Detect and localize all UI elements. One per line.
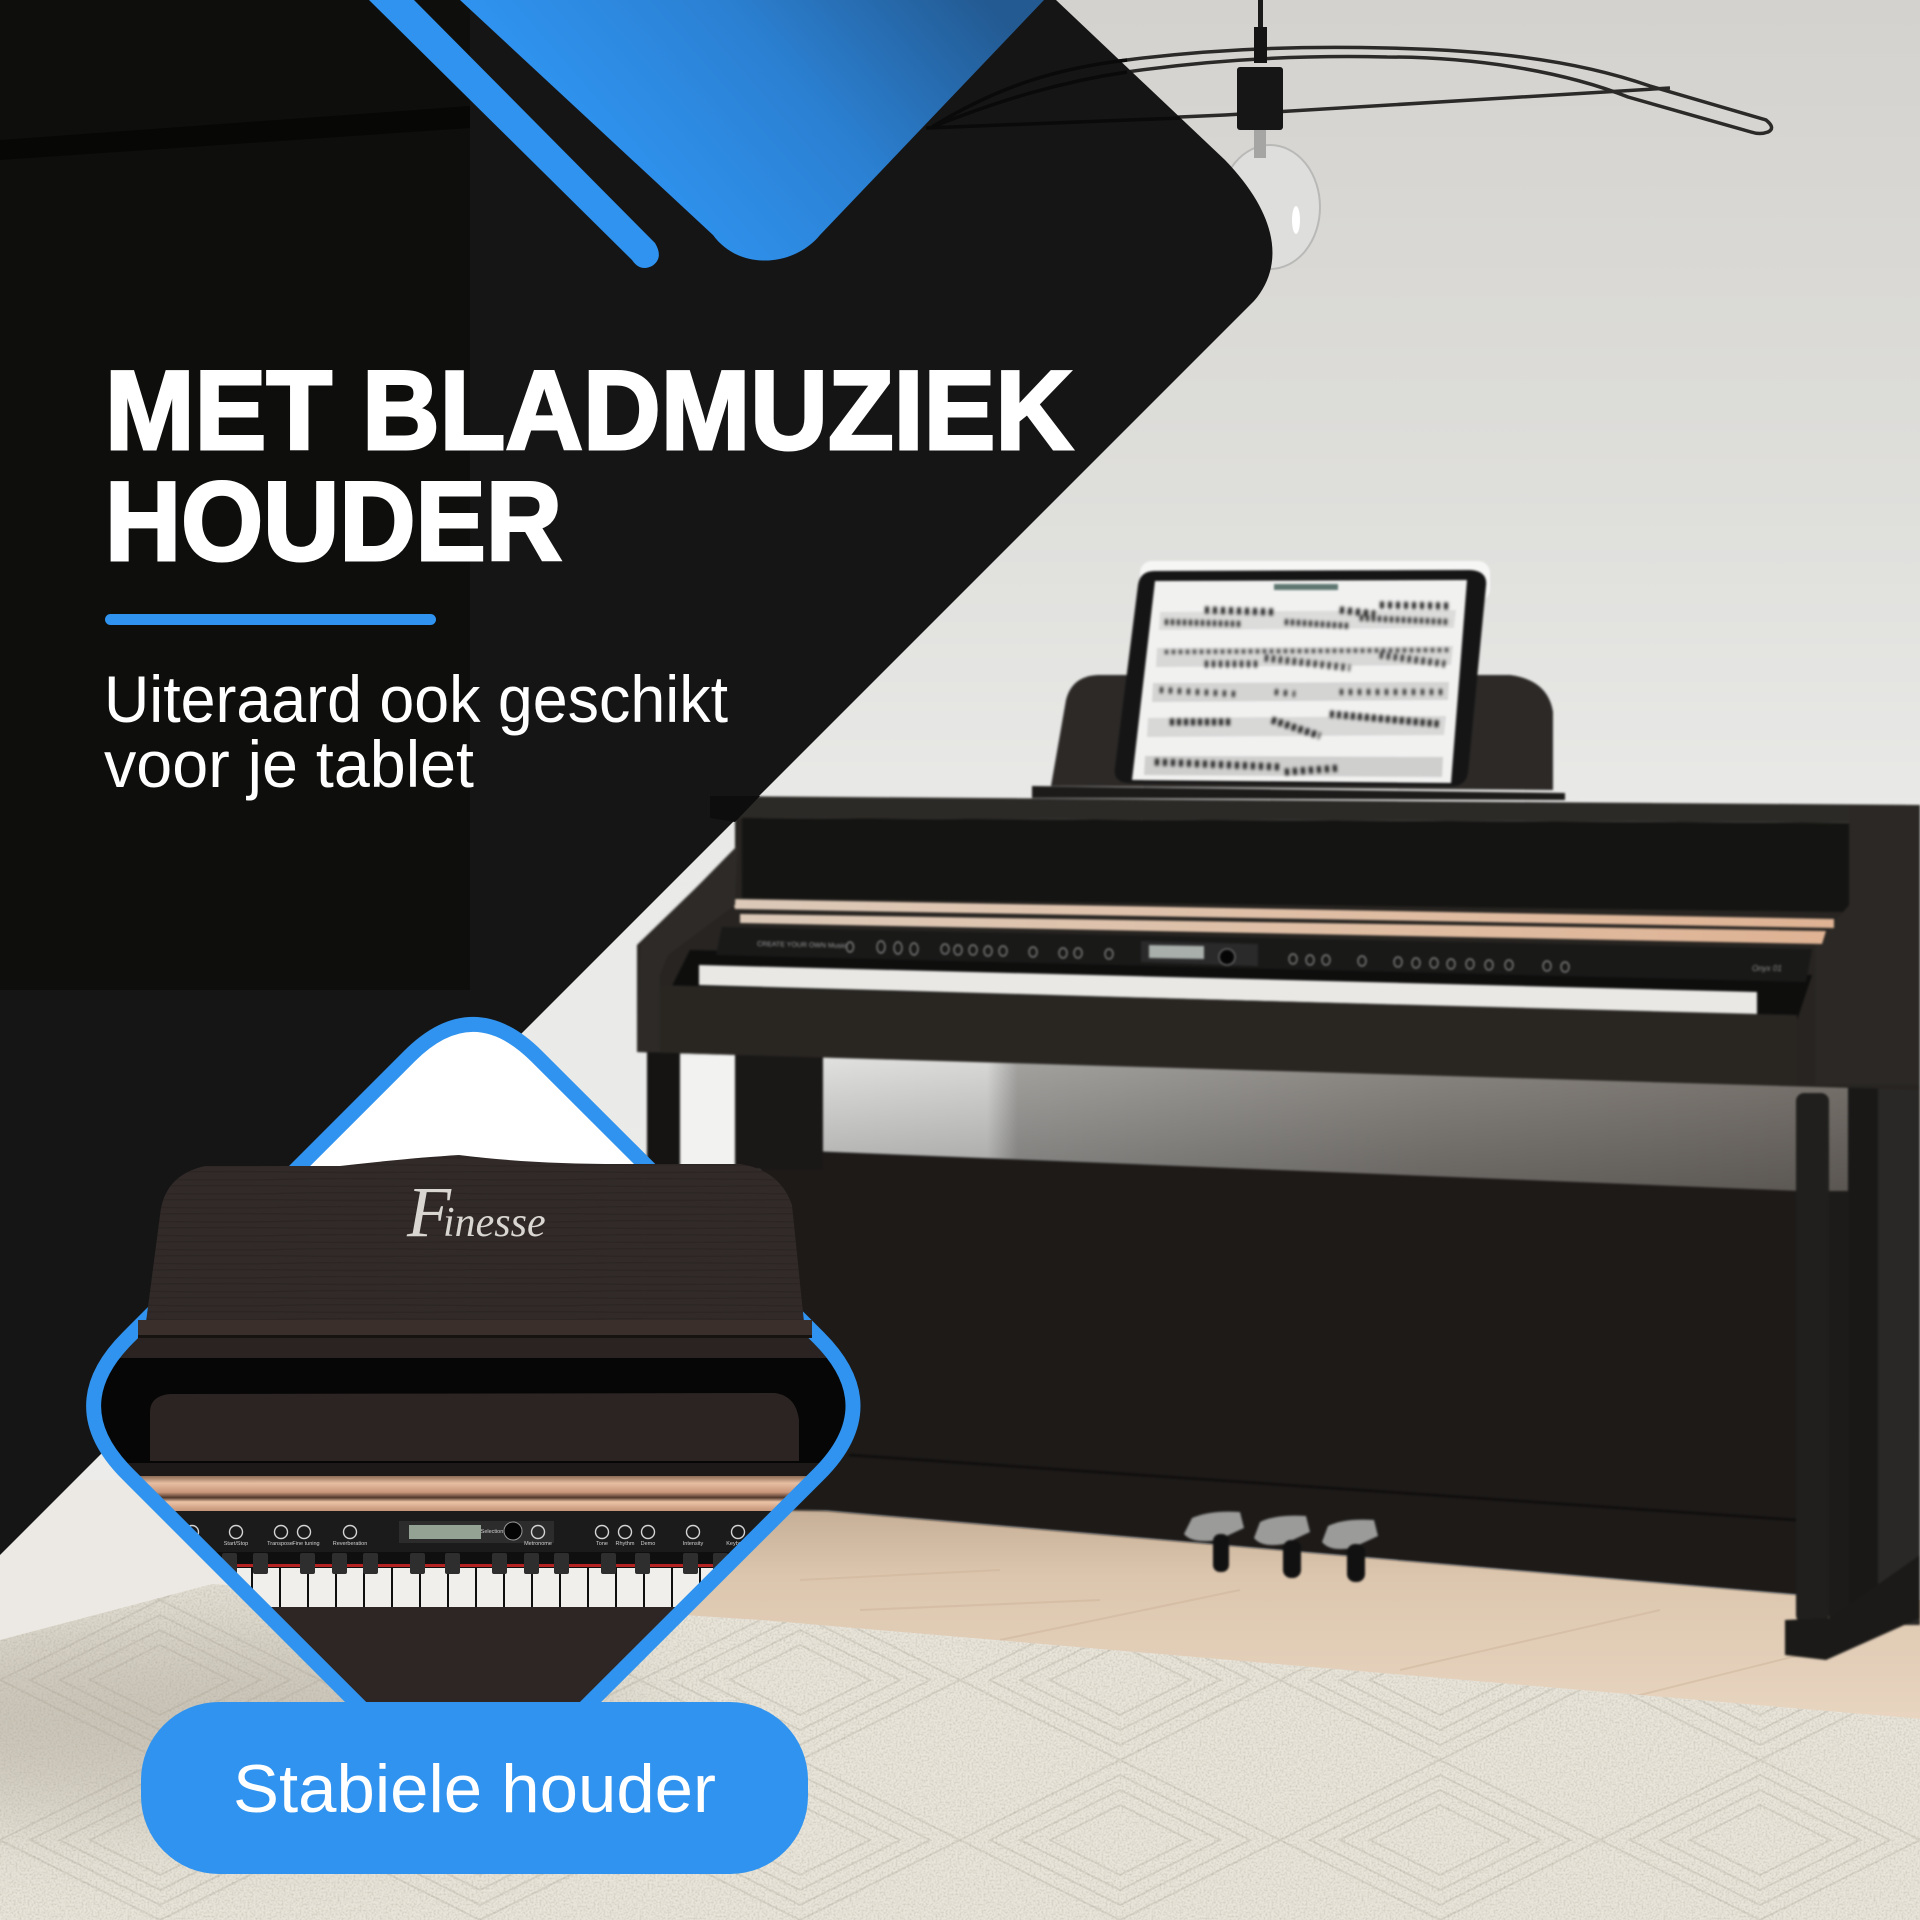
control strip: Start/Stop (224, 1541, 248, 1547)
control strip: Metronome (524, 1541, 552, 1547)
control strip: Transpose (267, 1541, 293, 1547)
caption pill (141, 1702, 808, 1874)
gold strip lower (740, 914, 1826, 944)
dark diagonal panel (0, 0, 1272, 1555)
left arm (637, 845, 738, 1052)
dark photo block behind panel (0, 0, 470, 990)
control strip: Tone (596, 1541, 608, 1547)
groove on lower panel (849, 1455, 1796, 1520)
digital piano (637, 561, 1920, 1660)
top lid (710, 796, 1920, 823)
folded desk (150, 1393, 799, 1461)
pedals (1184, 1512, 1378, 1582)
right leg and side panel (1796, 1085, 1920, 1631)
left wainscot strip (680, 1056, 735, 1166)
keys recess (670, 950, 1812, 1020)
piano lid corner seen through panel (710, 796, 760, 822)
tablet with sheet music (1115, 570, 1486, 786)
title: HOUDER (105, 459, 562, 584)
control strip: Rhythm (616, 1541, 635, 1547)
inset diamond frame (94, 1024, 853, 1788)
upper body (637, 818, 1920, 1090)
inset diamond background (94, 1024, 853, 1788)
caption pill: Stabiele houder (233, 1751, 716, 1827)
accent blue gradient triangle (460, 0, 1044, 261)
control strip: Intensity (683, 1541, 703, 1547)
inset piano close-up (101, 1338, 846, 1702)
pendant lamp (926, 0, 1772, 269)
fall board edge (128, 1463, 819, 1476)
title: MET BLADMUZIEK (105, 348, 1073, 473)
white keys (216, 1552, 730, 1607)
tablet glow (1140, 561, 1490, 601)
dark beam in photo block (0, 106, 470, 160)
wooden music stand (138, 1155, 812, 1338)
right foot (1785, 1555, 1920, 1660)
control strip: Fine tuning (292, 1541, 320, 1547)
lamp wires through the panel (926, 60, 1180, 128)
control panel: Onyx 01 (1752, 964, 1782, 973)
title (105, 348, 1073, 584)
carpet (0, 1580, 1920, 1920)
gold strip upper (732, 899, 1834, 928)
stand base band (120, 1338, 827, 1358)
wall seen under the piano (823, 1050, 1848, 1196)
right side panel (1815, 805, 1920, 1085)
control strip: Selection (481, 1529, 503, 1535)
folded music stand (1051, 675, 1553, 790)
subtitle (104, 662, 728, 801)
title underline (105, 614, 436, 625)
music stand shelf (1032, 786, 1565, 800)
background: pale floor on the left (0, 1480, 640, 1640)
background: wooden floor (520, 1500, 1920, 1719)
control panel (716, 927, 1812, 982)
inset: music stand close-up (86, 1016, 860, 1702)
control strip: Keyboard (726, 1541, 750, 1547)
control strip: Demo (641, 1541, 655, 1547)
key slip (637, 985, 1797, 1085)
brand logo on stand: Finesse (406, 1172, 546, 1252)
subtitle: voor je tablet (104, 727, 474, 801)
gold trim (140, 1476, 806, 1511)
control strip (175, 1511, 772, 1552)
music desk recess (742, 818, 1849, 912)
white keys (699, 965, 1757, 1015)
control panel: CREATE YOUR OWN Music (757, 941, 847, 950)
lower front panel (760, 1149, 1800, 1595)
key slip (272, 1607, 675, 1702)
accent blue diagonal bar (369, 0, 659, 268)
subtitle: Uiteraard ook geschikt (104, 662, 728, 736)
dark cavity (101, 1358, 846, 1463)
left legs (647, 1050, 823, 1170)
control strip: Reverberation (333, 1541, 367, 1547)
